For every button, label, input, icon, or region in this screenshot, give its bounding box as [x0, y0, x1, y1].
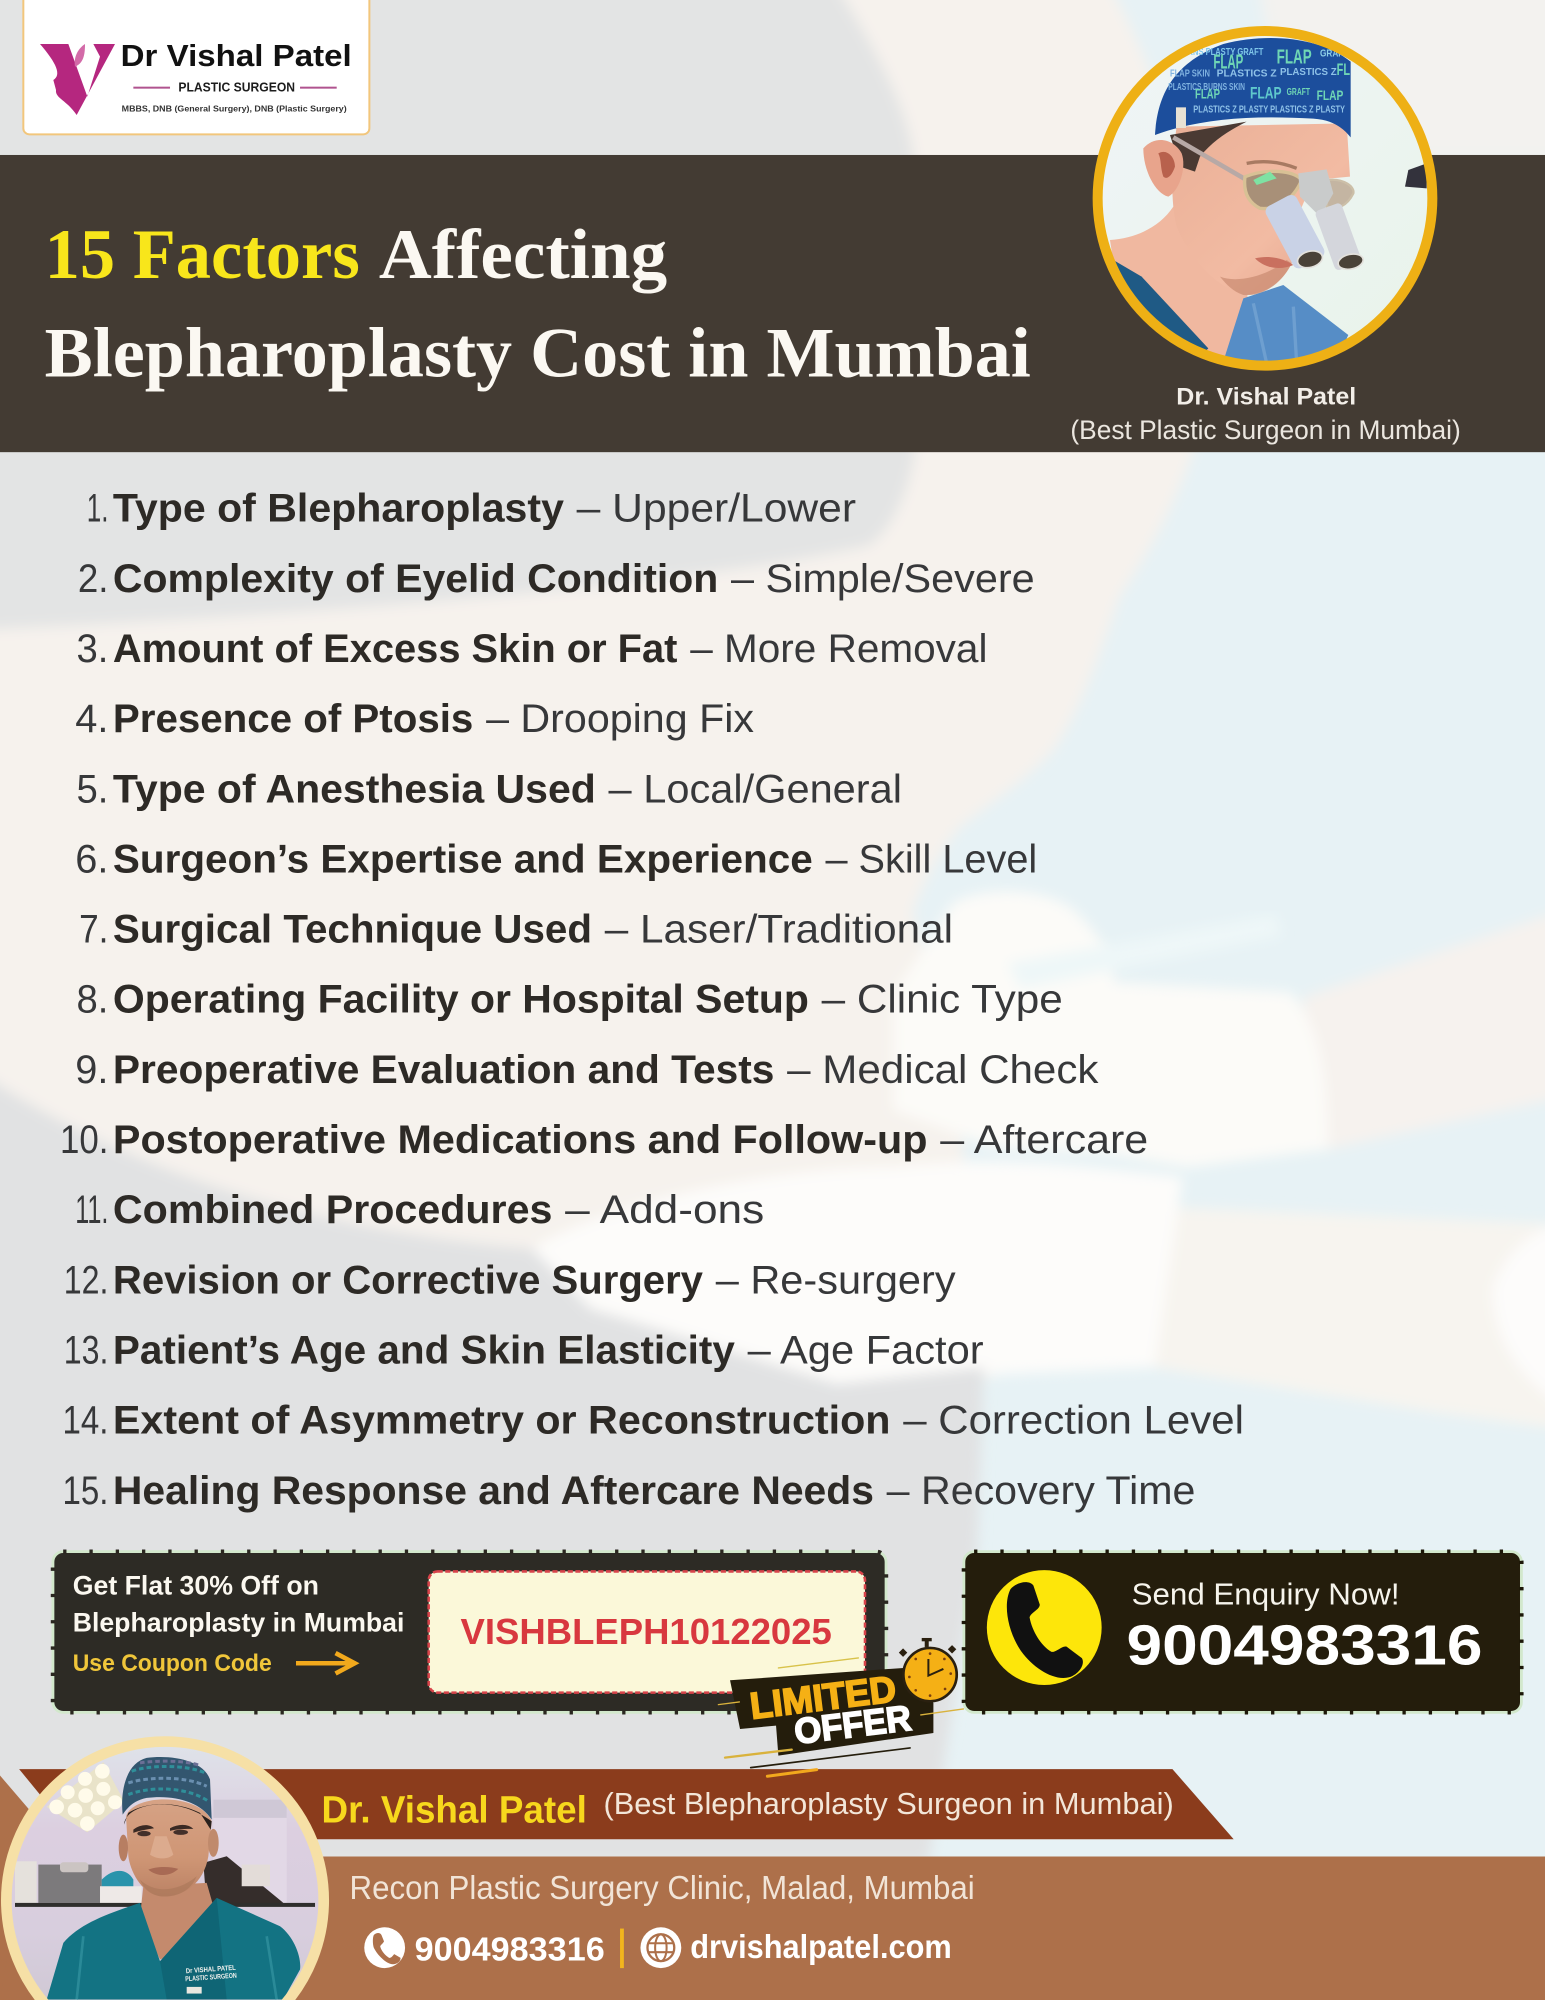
coupon code box: VISHBLEPH10122025 [461, 1612, 832, 1652]
factor 4: – Drooping Fix [486, 697, 754, 741]
portrait: surgeon with loupes: FLAP [1213, 50, 1243, 73]
list: 15 factors [60, 487, 1244, 1513]
portrait: surgeon with loupes: PLASTICS Z [1217, 69, 1277, 80]
factor 2: Complexity of Eyelid Condition [113, 557, 718, 601]
neck [140, 1883, 213, 1960]
factor 13: 13. [64, 1329, 108, 1373]
portrait: surgeon with loupes: PLASTICS Z PLASTY PLASTICS Z PLASTY [1193, 105, 1345, 116]
factor 14: Extent of Asymmetry or Reconstruction [113, 1399, 891, 1443]
portrait: surgeon with loupes: FLAP [1195, 85, 1220, 101]
panel: enquiry [964, 1552, 1521, 1712]
factor 13: – Age Factor [748, 1329, 984, 1373]
factor 9: Preoperative Evaluation and Tests [113, 1048, 774, 1092]
factor 8: Operating Facility or Hospital Setup [113, 978, 809, 1022]
title: Affecting [379, 215, 668, 294]
coupon code box [429, 1571, 865, 1693]
title: 15 Factors [45, 215, 360, 294]
factor 6: Surgeon’s Expertise and Experience [113, 837, 813, 881]
factor 8 [77, 978, 1063, 1022]
panel: coupon offer: Get Flat 30% Off on [73, 1570, 319, 1600]
factor 5 [77, 767, 902, 811]
portrait: surgeon with loupes: PLASTICS BURNS SKIN [1168, 82, 1245, 93]
name banner: Dr. Vishal Patel [322, 1789, 587, 1832]
factor 15: Healing Response and Aftercare Needs [113, 1469, 874, 1513]
factor 1: Type of Blepharoplasty [113, 487, 564, 531]
title [45, 215, 1031, 392]
patterned cap [1155, 38, 1351, 137]
factor 6: – Skill Level [825, 837, 1037, 881]
surgeon caption: (Best Plastic Surgeon in Mumbai) [1070, 415, 1461, 445]
factor 10: – Aftercare [940, 1118, 1148, 1162]
factor 1: 1. [87, 487, 108, 531]
factor 5: 5. [77, 767, 108, 811]
panel: coupon offer [53, 1552, 886, 1712]
portrait: surgeon with loupes [1093, 27, 1440, 373]
panel: coupon offer: Use Coupon Code [73, 1650, 272, 1677]
contact block [350, 1870, 975, 1968]
loupes and frames [1173, 137, 1247, 180]
icon: V logo with face [40, 44, 115, 115]
corner triangle [0, 1776, 31, 2000]
badge: limited offer [718, 1638, 963, 1776]
factor 11: Combined Procedures [113, 1188, 552, 1232]
factor 8: – Clinic Type [822, 978, 1063, 1022]
factor 2 [78, 557, 1035, 601]
factor 3: Amount of Excess Skin or Fat [113, 627, 677, 671]
title: Blepharoplasty Cost in Mumbai [45, 313, 1031, 392]
surgical lamp [47, 1762, 124, 1832]
factor 11 [75, 1188, 764, 1232]
head [126, 1799, 212, 1896]
panel: enquiry: Send Enquiry Now! [1132, 1578, 1400, 1612]
name banner [19, 1769, 1234, 1839]
factor 15: 15. [63, 1469, 108, 1513]
badge: limited offer: OFFER [792, 1697, 913, 1752]
factor 12: – Re-surgery [716, 1258, 956, 1302]
factor 2: 2. [78, 557, 108, 601]
factor 3: 3. [77, 627, 108, 671]
factor 9: 9. [75, 1048, 108, 1092]
logo card: MBBS, DNB (General Surgery), DNB (Plastic Surgery) [122, 105, 347, 114]
factor 7: – Laser/Traditional [605, 908, 953, 952]
factor 3: – More Removal [690, 627, 987, 671]
factor 7: Surgical Technique Used [113, 908, 592, 952]
arrow [296, 1653, 355, 1673]
icon: phone [987, 1570, 1102, 1685]
bottom brown band [0, 1857, 1545, 2000]
scrubs [47, 1898, 300, 2000]
name banner: (Best Blepharoplasty Surgeon in Mumbai) [603, 1787, 1174, 1821]
icon: globe [640, 1927, 681, 1968]
portrait: surgeon with loupes: FLAP [1317, 87, 1343, 103]
contact block: 9004983316 [415, 1931, 605, 1968]
factor 8: 8. [77, 978, 108, 1022]
factor 4 [75, 697, 754, 741]
factor 15 [63, 1469, 1195, 1513]
portrait: surgeon with loupes: GRAFT [1320, 49, 1348, 60]
icon: stopwatch [899, 1638, 957, 1701]
logo card [23, 0, 369, 134]
badge: limited offer: LIMITED [748, 1667, 898, 1727]
factor 11: 11. [75, 1188, 108, 1232]
panel: enquiry: 9004983316 [1127, 1614, 1482, 1677]
portrait: doctor in teal scrubs: Dr VISHAL PATEL [186, 1965, 237, 1975]
factor 14: – Correction Level [903, 1399, 1244, 1443]
surgeon caption: Dr. Vishal Patel [1176, 383, 1356, 410]
portrait: surgeon with loupes: FL [1337, 60, 1350, 79]
factor 1: – Upper/Lower [577, 487, 856, 531]
factor 15: – Recovery Time [887, 1469, 1195, 1513]
face [1172, 123, 1350, 295]
factor 7 [79, 908, 953, 952]
factor 6: 6. [75, 837, 108, 881]
portrait: surgeon with loupes: FLAP [1250, 83, 1282, 102]
factor 11: – Add-ons [565, 1188, 764, 1232]
factor 14: 14. [63, 1399, 108, 1443]
factor 1 [87, 487, 856, 531]
portrait: surgeon with loupes: FLAP [1277, 45, 1312, 68]
factor 12: Revision or Corrective Surgery [113, 1258, 703, 1302]
cap [122, 1757, 212, 1820]
factor 5: Type of Anesthesia Used [113, 767, 596, 811]
factor 2: – Simple/Severe [731, 557, 1035, 601]
contact block: drvishalpatel.com [690, 1929, 952, 1966]
portrait: surgeon with loupes: GRAFT [1287, 87, 1310, 98]
portrait: surgeon with loupes: BURNS PLASTY GRAFT [1177, 47, 1263, 58]
icon: phone small [364, 1927, 405, 1968]
factor 4: Presence of Ptosis [113, 697, 473, 741]
factor 13 [64, 1329, 984, 1373]
contact block: Recon Plastic Surgery Clinic, Malad, Mumbai [350, 1870, 975, 1907]
shelf items [15, 1861, 37, 1903]
surgeon caption [1070, 383, 1461, 445]
header band [0, 155, 1545, 452]
logo card: Dr Vishal Patel [121, 38, 352, 73]
factor 3 [77, 627, 987, 671]
factor 9 [75, 1048, 1099, 1092]
factor 9: – Medical Check [787, 1048, 1099, 1092]
panel: coupon offer: Blepharoplasty in Mumbai [73, 1607, 404, 1637]
portrait: doctor in teal scrubs [0, 1740, 333, 2000]
neck and shoulder [1110, 206, 1248, 356]
portrait: surgeon with loupes: PLASTICS Z [1280, 67, 1337, 78]
factor 10: Postoperative Medications and Follow-up [113, 1118, 928, 1162]
logo card: PLASTIC SURGEON [178, 81, 295, 95]
factor 4: 4. [75, 697, 108, 741]
factor 14 [63, 1399, 1244, 1443]
portrait: doctor in teal scrubs: PLASTIC SURGEON [185, 1973, 237, 1983]
factor 5: – Local/General [609, 767, 902, 811]
portrait: surgeon with loupes: FLAP SKIN [1170, 69, 1210, 80]
factor 10: 10. [60, 1118, 108, 1162]
factor 12: 12. [64, 1258, 108, 1302]
factor 13: Patient’s Age and Skin Elasticity [113, 1329, 735, 1373]
factor 7: 7. [79, 908, 108, 952]
factor 12 [64, 1258, 956, 1302]
